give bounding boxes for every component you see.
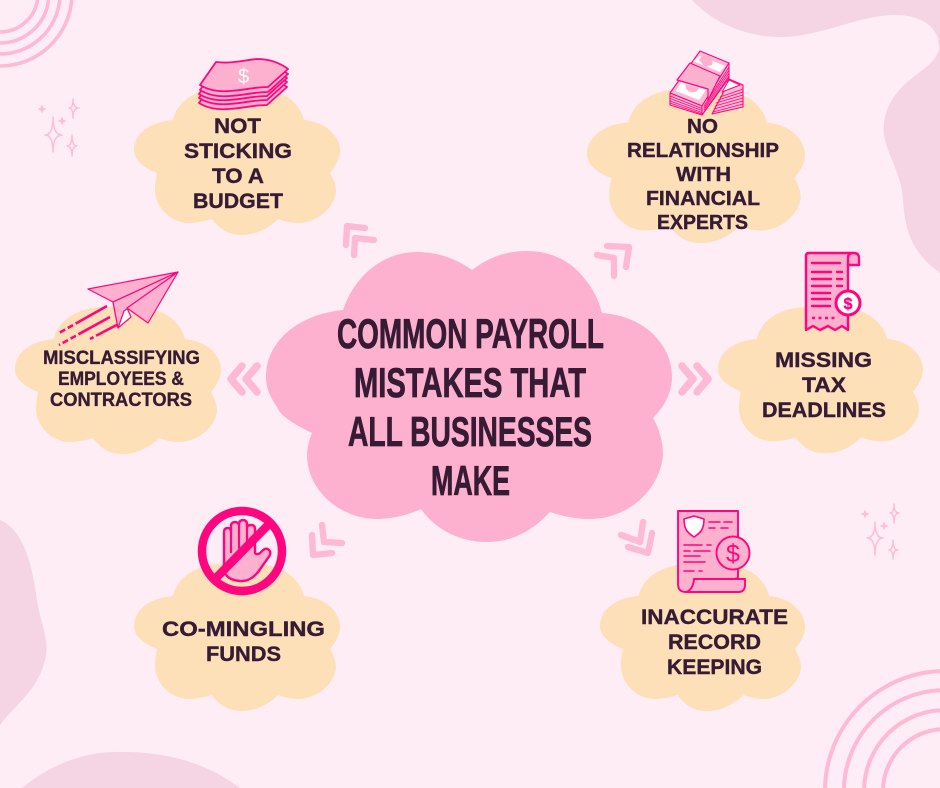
arrow: to right (682, 366, 708, 392)
title: ALL BUSINESSES (348, 408, 592, 455)
icon: money bundles (670, 51, 743, 115)
panel: no relationship with financial experts (587, 51, 805, 243)
panel: misclassifying employees and contractors: CONTRACTORS (50, 390, 192, 411)
panel: no relationship with financial experts: RELATIONSHIP (627, 139, 779, 162)
panel: no relationship with financial experts: FINANCIAL (646, 187, 760, 210)
sparkles: bottom right (862, 504, 899, 559)
panel: not sticking to a budget: STICKING (184, 139, 292, 163)
arrow: to bottom left (312, 525, 342, 555)
icon: receipt with dollar coin: $ (844, 296, 853, 313)
panel: missing tax deadlines (718, 253, 923, 453)
background blob: top right (692, 0, 940, 273)
panel: not sticking to a budget: BUDGET (193, 189, 283, 213)
panel: misclassifying employees and contractors: EMPLOYEES & (58, 369, 184, 390)
arrow: to left (231, 366, 257, 392)
panel: no relationship with financial experts: NO (687, 115, 718, 138)
panel: co-mingling funds: FUNDS (206, 642, 281, 666)
title: MISTAKES THAT (354, 359, 586, 406)
icon: stack of money: $ (238, 66, 249, 88)
panel: central cloud (266, 251, 672, 542)
panel: no relationship with financial experts: WITH (676, 163, 731, 186)
panel: co-mingling funds (134, 511, 340, 711)
panel: no relationship with financial experts: EXPERTS (657, 211, 748, 234)
icon: document with shield and coin: $ (726, 540, 740, 568)
title: MAKE (431, 457, 510, 504)
icon: paper airplane (59, 272, 178, 345)
panel: misclassifying employees and contractors: MISCLASSIFYING (43, 348, 200, 369)
title (337, 310, 604, 504)
icon: stack of money (199, 59, 288, 109)
icon: receipt with dollar coin (806, 253, 860, 330)
panel: inaccurate record keeping (600, 511, 805, 711)
panel: missing tax deadlines: DEADLINES (762, 398, 886, 422)
icon: document with shield and coin (678, 511, 750, 592)
arrow: to bottom right (621, 522, 652, 553)
panel: co-mingling funds: CO-MINGLING (162, 617, 325, 641)
title: COMMON PAYROLL (337, 310, 604, 357)
panel: missing tax deadlines: MISSING (775, 348, 872, 372)
panel: not sticking to a budget: TO A (212, 164, 264, 188)
panel: not sticking to a budget (134, 59, 340, 235)
background blob: left (0, 520, 47, 725)
decorative arcs: bottom right (825, 671, 940, 788)
icon: prohibited hand (202, 511, 282, 591)
panel: misclassifying employees and contractors (15, 272, 221, 454)
arrow: to top left (346, 226, 374, 255)
panel: inaccurate record keeping: KEEPING (667, 655, 762, 679)
panel: not sticking to a budget: NOT (214, 114, 261, 138)
panel: missing tax deadlines: TAX (802, 373, 847, 397)
panel: inaccurate record keeping: RECORD (668, 630, 761, 654)
arrow: to top right (597, 246, 629, 276)
background blob: bottom (22, 752, 240, 788)
decorative arcs: top left (0, 0, 72, 66)
panel: inaccurate record keeping: INACCURATE (641, 605, 788, 629)
sparkles: top left (39, 99, 79, 156)
